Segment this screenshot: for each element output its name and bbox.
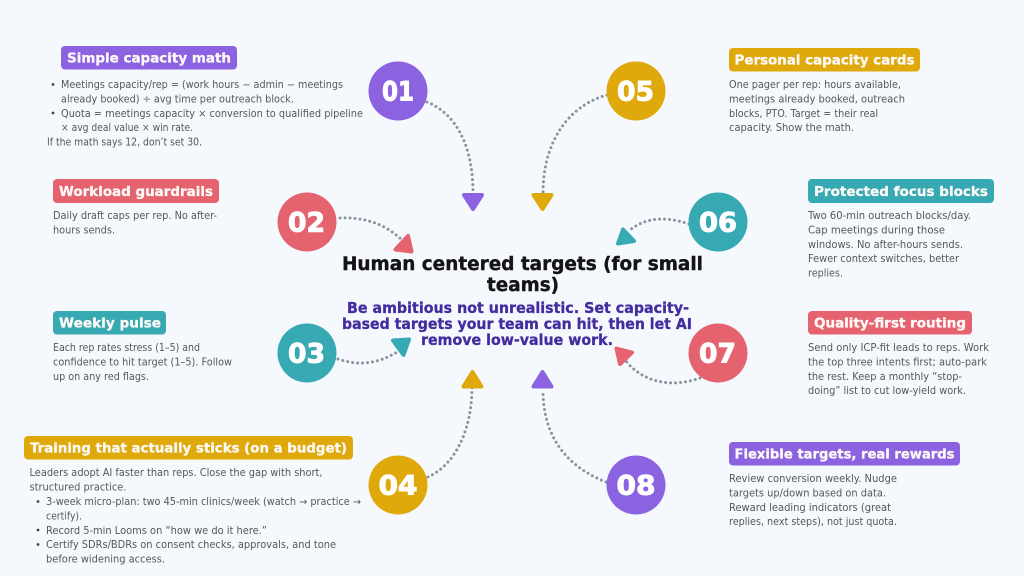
panel: weekly pulse <box>53 311 232 383</box>
number badge 06 <box>688 192 748 252</box>
text block: quality-first routing <box>808 343 989 397</box>
text block: quality-first routing: the top three intents first; auto-park <box>808 358 987 368</box>
text block: flexible targets, real rewards: Review conversion weekly. Nudge <box>729 474 897 485</box>
text block: protected focus blocks: Cap meetings during those <box>808 226 945 236</box>
number badge 07 <box>688 324 748 382</box>
heading: training that actually sticks: Training that actually sticks (on a budget) <box>30 441 347 457</box>
text block: weekly pulse <box>53 343 232 383</box>
panel: training that actually sticks <box>24 436 361 566</box>
number badge 04: 04 <box>378 470 418 502</box>
heading: workload guardrails <box>53 179 219 203</box>
text block: training that actually sticks: 3-week micro-plan: two 45-min clinics/week (watch → practice → <box>46 497 361 508</box>
text block: protected focus blocks: windows. No after-hours sends. <box>808 240 963 251</box>
text block: personal capacity cards: blocks, PTO. Target = their real <box>729 109 878 120</box>
subtitle: Be ambitious not unrealistic. Set capacity- <box>347 299 689 317</box>
arrow: 08 to center <box>534 372 606 482</box>
heading: flexible targets, real rewards <box>729 442 960 466</box>
text block: personal capacity cards: capacity. Show the math. <box>729 123 854 134</box>
number badge 05: 05 <box>617 76 654 108</box>
title: teams) <box>487 274 559 296</box>
text block: personal capacity cards <box>729 80 905 134</box>
text block: simple capacity math: If the math says 12, don’t set 30. <box>47 138 202 148</box>
panel: flexible targets, real rewards <box>729 442 960 528</box>
heading: simple capacity math <box>61 46 237 70</box>
number badge 05 <box>606 62 666 120</box>
text block: flexible targets, real rewards: targets up/down based on data. <box>729 488 886 500</box>
text block: personal capacity cards: meetings already booked, outreach <box>729 94 905 106</box>
panel: personal capacity cards <box>729 48 920 134</box>
panel: protected focus blocks <box>807 179 994 280</box>
text block: personal capacity cards: One pager per rep: hours available, <box>729 80 901 91</box>
number badge 02: 02 <box>288 208 325 238</box>
number badge 01 <box>368 62 428 120</box>
text block: quality-first routing: doing” list to cut low-yield work. <box>808 386 966 397</box>
arrow: 01 to center <box>427 102 482 209</box>
text block: workload guardrails: Daily draft caps per rep. No after- <box>53 211 217 222</box>
number badge 03: 03 <box>288 338 325 370</box>
text block: protected focus blocks: replies. <box>808 268 843 280</box>
heading: personal capacity cards <box>729 48 920 72</box>
text block: training that actually sticks: Record 5-min Looms on “how we do it here.” <box>46 526 267 537</box>
text block: weekly pulse: confidence to hit target (1–5). Follow <box>53 358 232 368</box>
text block: protected focus blocks: Fewer context switches, better <box>808 254 960 265</box>
panel: simple capacity math <box>47 46 363 148</box>
text block: workload guardrails: hours sends. <box>53 226 115 236</box>
heading: weekly pulse <box>53 311 166 334</box>
number badge 01: 01 <box>382 76 414 108</box>
text block: training that actually sticks: certify). <box>46 512 82 522</box>
text block: flexible targets, real rewards <box>729 474 897 528</box>
arrow: 07 to center <box>616 348 700 383</box>
heading: weekly pulse: Weekly pulse <box>59 316 161 332</box>
text block: training that actually sticks: Certify SDRs/BDRs on consent checks, approvals, and tone <box>46 540 336 551</box>
heading: quality-first routing: Quality-first routing <box>814 316 966 332</box>
subtitle: remove low-value work. <box>421 331 613 349</box>
title <box>342 253 703 296</box>
heading: flexible targets, real rewards: Flexible targets, real rewards <box>734 447 954 463</box>
number badge 03 <box>278 324 336 382</box>
arrow: 03 to center <box>338 340 409 363</box>
panel: workload guardrails <box>53 179 219 236</box>
text block: flexible targets, real rewards: replies, next steps), not just quota. <box>729 517 897 528</box>
text block: training that actually sticks <box>30 468 361 566</box>
number badge 07: 07 <box>699 338 736 370</box>
text block: quality-first routing: Send only ICP-fit leads to reps. Work <box>808 343 989 354</box>
text block: simple capacity math: Quota = meetings capacity × conversion to qualified pipeline <box>61 109 363 120</box>
text block: workload guardrails <box>53 211 217 236</box>
panel: quality-first routing <box>808 311 989 397</box>
text block: simple capacity math <box>47 80 363 148</box>
heading: protected focus blocks <box>808 179 994 203</box>
arrow: 05 to center <box>534 95 607 209</box>
subtitle: based targets your team can hit, then let AI <box>342 315 692 333</box>
text block: quality-first routing: the rest. Keep a monthly “stop- <box>808 372 962 383</box>
arrow: 06 to center <box>618 219 689 244</box>
title: Human centered targets (for small <box>342 253 703 275</box>
subtitle <box>342 299 692 349</box>
number badge 06: 06 <box>699 208 737 238</box>
text block: training that actually sticks: Leaders adopt AI faster than reps. Close the gap with short, <box>30 468 322 479</box>
text block: simple capacity math: already booked) ÷ avg time per outreach block. <box>61 94 294 106</box>
number badge 08: 08 <box>616 470 656 502</box>
text block: weekly pulse: Each rep rates stress (1–5) and <box>53 343 200 354</box>
heading: personal capacity cards: Personal capacity cards <box>734 53 914 69</box>
heading: workload guardrails: Workload guardrails <box>59 184 213 200</box>
arrow: 02 to center <box>340 218 412 252</box>
text block: flexible targets, real rewards: Reward leading indicators (great <box>729 503 891 514</box>
text block: simple capacity math: Meetings capacity/rep = (work hours − admin − meetings <box>61 80 343 91</box>
text block: protected focus blocks: Two 60-min outreach blocks/day. <box>807 211 971 222</box>
text block: training that actually sticks: structured practice. <box>30 482 126 494</box>
text block: training that actually sticks: before widening access. <box>46 554 165 566</box>
number badge 02 <box>278 192 336 252</box>
number badge 08 <box>606 456 666 514</box>
arrow: 04 to center <box>428 372 482 477</box>
text block: simple capacity math: × avg deal value × win rate. <box>61 123 193 134</box>
number badge 04 <box>368 456 428 514</box>
text block: weekly pulse: up on any red flags. <box>53 372 149 383</box>
heading: quality-first routing <box>808 311 972 334</box>
heading: protected focus blocks: Protected focus blocks <box>814 184 988 200</box>
text block: protected focus blocks <box>807 211 971 280</box>
heading: training that actually sticks <box>24 436 353 460</box>
heading: simple capacity math: Simple capacity math <box>67 51 231 67</box>
